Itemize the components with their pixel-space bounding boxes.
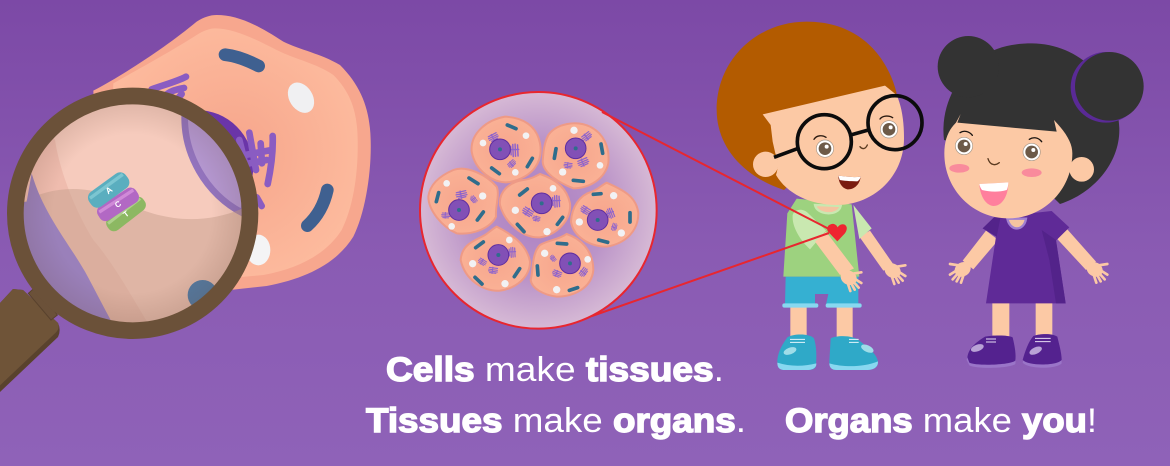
girl ear (1069, 157, 1094, 182)
magnifying glass (0, 96, 260, 392)
boy t-shirt (783, 199, 859, 277)
tissue cell 4 (500, 174, 570, 237)
girl right arm and hand (1057, 229, 1107, 283)
lens: cell edge band (24, 138, 68, 202)
base T: T (121, 209, 131, 219)
heart (827, 224, 847, 241)
boy glasses (774, 96, 922, 169)
base A: A (103, 184, 115, 196)
tissue background (420, 92, 657, 329)
handle face (0, 289, 59, 385)
girl collar and neck (1007, 219, 1026, 228)
boy shorts cuffs (782, 303, 862, 308)
boy nose (860, 145, 867, 149)
boy right arm and hand (859, 231, 905, 284)
boy hair (717, 22, 897, 190)
nucleus (140, 110, 253, 223)
boy legs (790, 307, 853, 340)
girl nose (988, 159, 999, 165)
cell interior (107, 28, 358, 278)
cell membrane (93, 15, 371, 290)
large cell under magnifying glass (93, 15, 371, 290)
girl face (944, 114, 1072, 218)
caption: cells make tissues: Cells make tissues . (386, 351, 724, 389)
organelle: lower white vacuole (246, 235, 270, 265)
girl dress shading (983, 217, 1066, 303)
boy mouth (838, 176, 861, 189)
boy sleeve (853, 205, 872, 239)
boy shoes (777, 334, 878, 370)
girl shoes (967, 334, 1062, 368)
handle (0, 289, 60, 392)
girl left bun (938, 36, 999, 97)
girl hair (943, 43, 1119, 204)
tissue cell 7 (531, 234, 593, 297)
base C: C (113, 199, 123, 210)
boy shorts (785, 277, 858, 305)
lens view (24, 104, 242, 322)
girl legs (992, 302, 1052, 338)
girl character (938, 36, 1144, 368)
DNA bases (85, 169, 149, 234)
caption: organs make you: Organs make you! (785, 402, 1097, 440)
boy character (717, 22, 922, 370)
tissue circle (420, 92, 657, 329)
girl eyes (955, 137, 1040, 161)
lens: magnified nucleus (181, 116, 242, 216)
boy eyes (816, 121, 898, 157)
lens base (54, 104, 242, 322)
tissue cell 5 (571, 183, 638, 247)
girl mouth (979, 182, 1008, 206)
lens: blue organelle (188, 280, 214, 305)
lens: shaded lower region (20, 189, 247, 330)
boy eyebrows (814, 116, 893, 139)
girl eyebrows (960, 131, 1042, 142)
girl left arm and hand (950, 231, 998, 283)
girl hair ribbon (1071, 52, 1141, 123)
boy left sleeve (793, 210, 826, 249)
organelle: right dark bar (307, 190, 327, 226)
boy left arm and hand (815, 232, 861, 291)
boy face (763, 86, 904, 205)
chromatin strands (152, 77, 273, 206)
tissue cell 6 (461, 227, 530, 291)
organelle: upper dark bar (225, 55, 259, 66)
caption: tissues make organs: Tissues make organs . (366, 402, 746, 440)
lens: purple outside of cell (24, 174, 110, 320)
lens rim (15, 96, 250, 331)
lens shading (22, 104, 242, 324)
organelle: white vacuole (282, 78, 320, 118)
girl right bun (1075, 52, 1144, 121)
red callout lines from tissue to heart (592, 112, 829, 316)
girl dress (983, 211, 1069, 303)
tissue cell 2 (543, 123, 609, 188)
tissue cell 3 (428, 169, 498, 234)
handle neck (28, 286, 57, 320)
boy ear (753, 152, 778, 177)
boy collar and neck (815, 205, 841, 213)
girl blush (949, 164, 1042, 177)
tissue cell 1 (472, 117, 541, 182)
